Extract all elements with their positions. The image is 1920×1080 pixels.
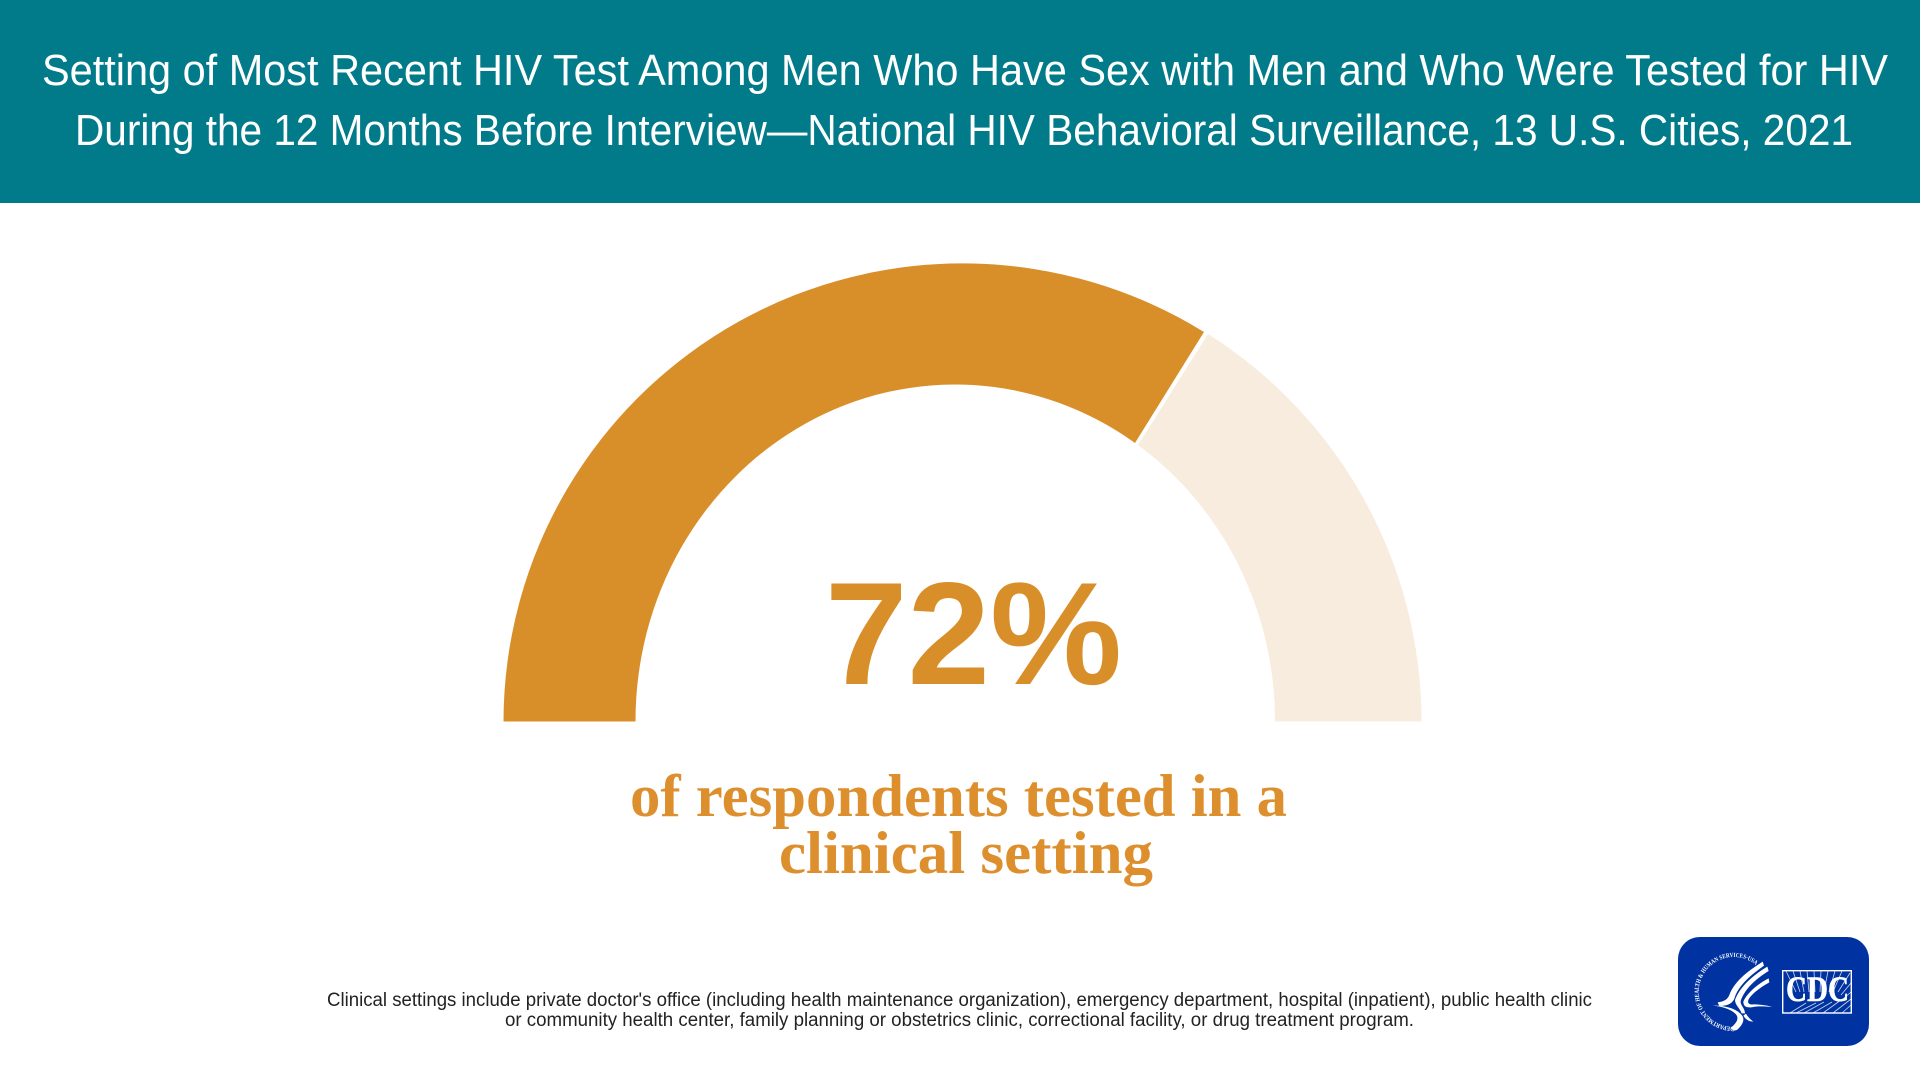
icon: HHS eagle bbox=[1713, 962, 1772, 1030]
subtitle: of respondents tested in a clinical setting bbox=[630, 763, 1287, 886]
footnote: or community health center, family planning or obstetrics clinic, correctional facility, or drug treatment program. bbox=[505, 1010, 1414, 1031]
big number: 72%: 72% bbox=[825, 552, 1122, 715]
icon: CDC logo box: CDC bbox=[1786, 969, 1849, 1009]
gauge segment: remainder bbox=[1138, 334, 1422, 722]
gauge chart: 72 percent bbox=[504, 263, 1422, 722]
title bbox=[42, 46, 1889, 155]
header banner with title bbox=[0, 0, 1920, 203]
icon: HHS seal ring text: DEPARTMENT OF HEALTH & HUMAN SERVICES·USA bbox=[1694, 952, 1758, 1032]
logo: HHS and CDC badge bbox=[1678, 937, 1869, 1046]
gauge segment: clinical setting 72% bbox=[504, 263, 1204, 722]
footnote: Clinical settings include private doctor's office (including health maintenance organization), emergency department, hospital (inpatient), public health clinic bbox=[327, 990, 1592, 1011]
subtitle: of respondents tested in a clinical setting: of respondents tested in a bbox=[630, 763, 1287, 829]
footnote bbox=[327, 990, 1592, 1031]
subtitle: of respondents tested in a clinical setting: clinical setting bbox=[779, 820, 1153, 886]
